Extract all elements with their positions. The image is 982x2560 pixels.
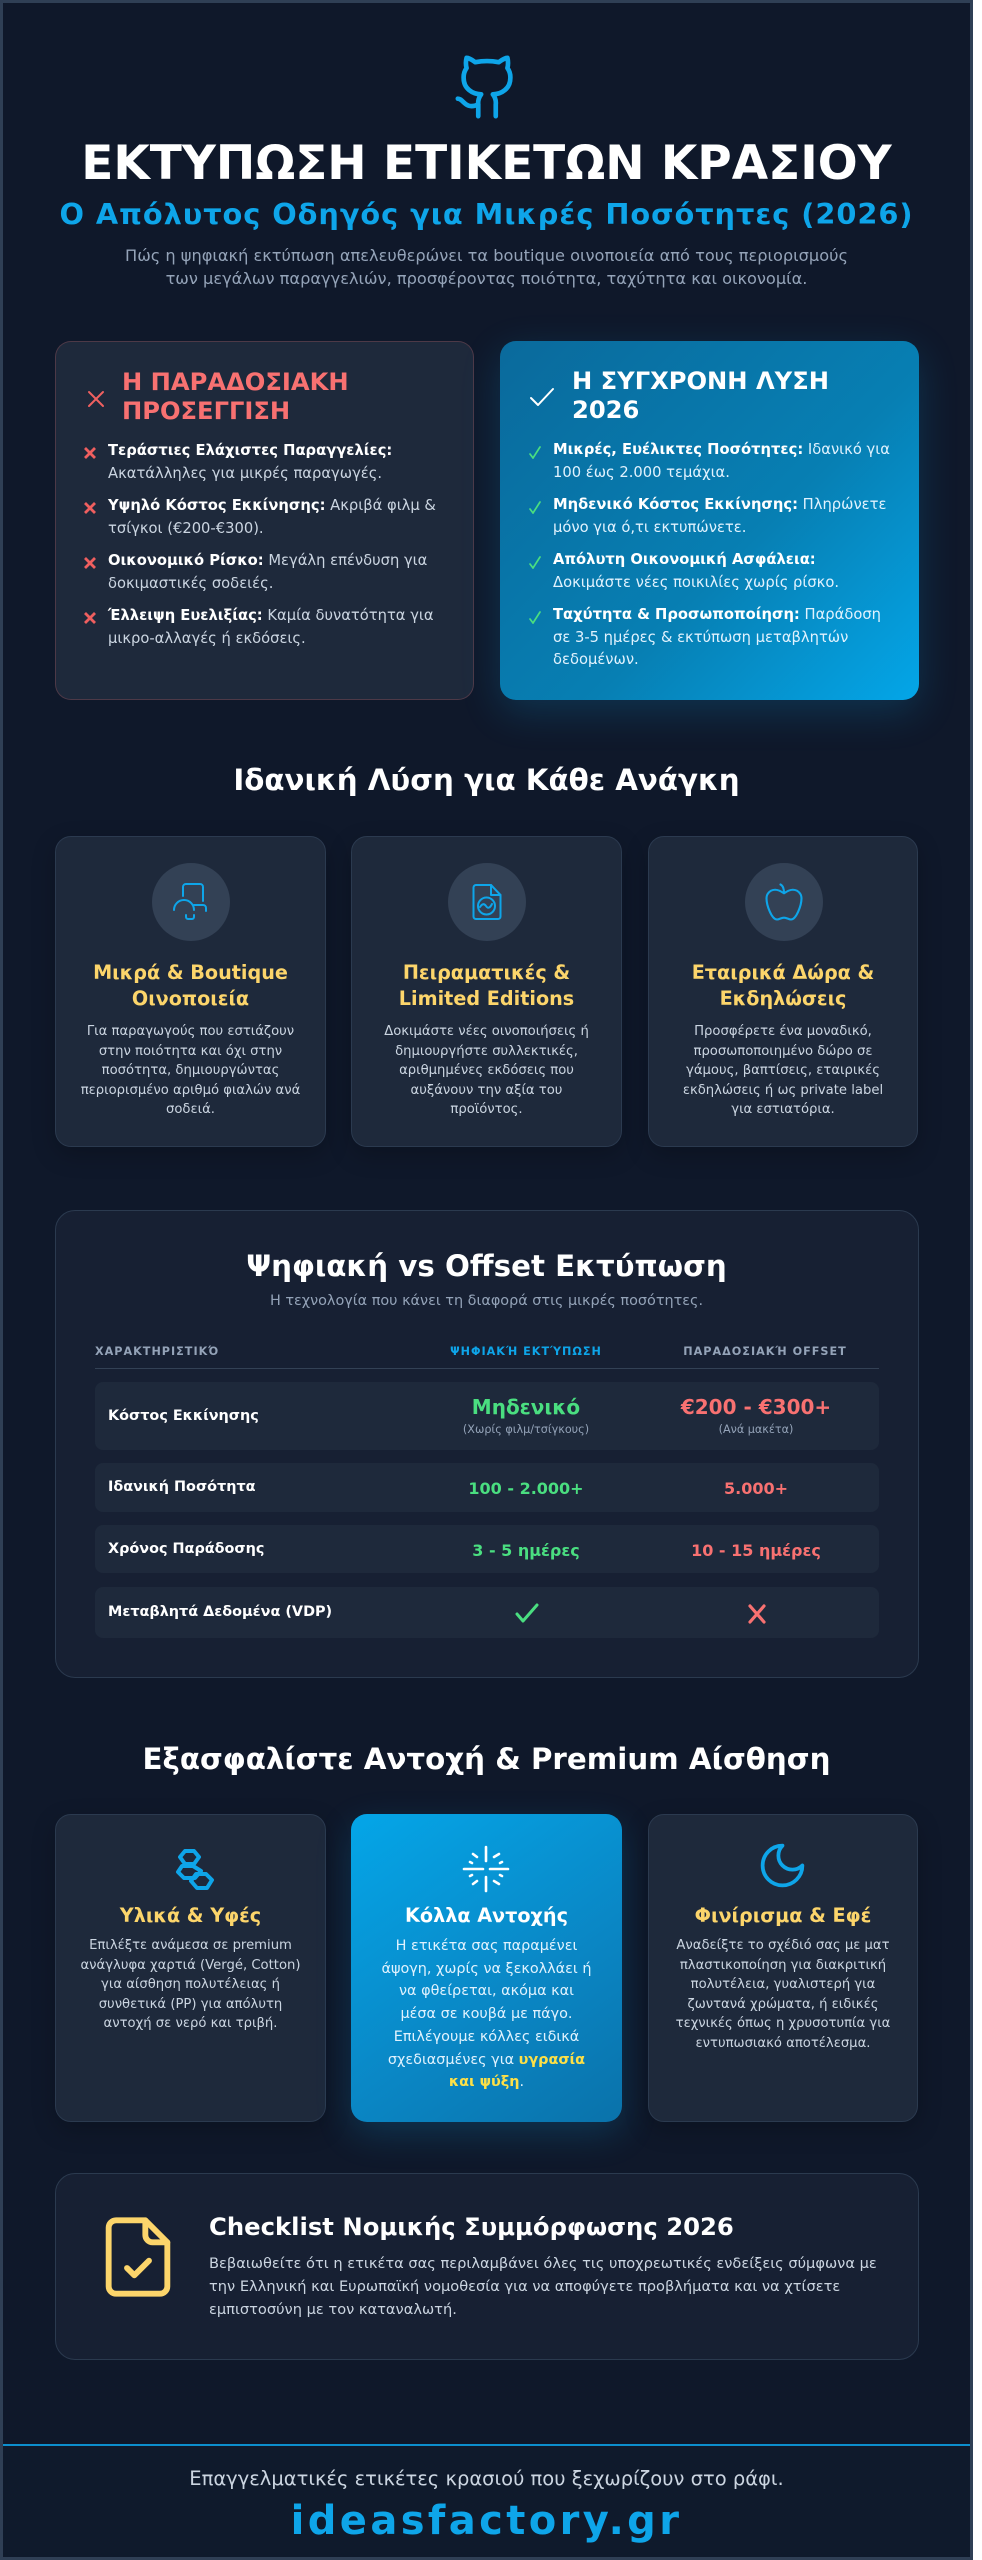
icon: cross [84,557,96,569]
card text: πολυτέλεια, γυαλιστερή για [691,1977,875,1992]
card title: Κόλλα Αντοχής [405,1904,568,1927]
icon: cat logo [456,56,513,118]
card title: Μικρά & Boutique [93,961,288,984]
text: δοκιμαστικές σοδειές. [108,575,273,592]
offset value: €200 - €300+ [681,1395,831,1419]
card text [683,1024,883,1117]
checklist title: Checklist Νομικής Συμμόρφωσης 2026 [209,2212,734,2241]
footer website: ideasfactory.gr [291,2498,682,2544]
card: adhesive [351,1814,622,2122]
card text: πλαστικοποίηση για διακριτική [680,1958,886,1972]
icon: burst [461,1844,511,1894]
panel: modern solution [500,341,919,700]
card title: Εταιρικά Δώρα & [692,961,874,984]
card text: να φθείρεται, ακόμα και [399,1983,574,1999]
card: corporate gifts [648,836,918,1147]
card text: αντοχή σε νερό και τριβή. [104,2016,277,2031]
row: start cost [95,1382,879,1450]
text: μικρο-αλλαγές ή εκδόσεις. [108,630,306,647]
heading: durability and premium feel: Εξασφαλίστε Αντοχή & Premium Αίσθηση [143,1742,830,1776]
card text: τεχνικές όπως η χρυσοτυπία για [676,2016,890,2031]
icon: heading cross [88,391,104,407]
card text: ζωντανά χρώματα, ή ειδικές [688,1996,878,2012]
heading: modern solution: Η ΣΥΓΧΡΟΝΗ ΛΥΣΗ [572,367,829,395]
card text: εντυπωσιακό αποτέλεσμα. [696,2036,870,2050]
text [553,441,890,481]
intro text: των μεγάλων παραγγελιών, προσφέροντας ποιότητα, ταχύτητα και οικονομία. [166,269,807,288]
list item: financial safety [529,551,839,591]
heading: traditional approach: Η ΠΑΡΑΔΟΣΙΑΚΗ [122,368,349,396]
card text: αυξάνουν την αξία του [411,1082,562,1098]
icon: check [529,501,541,514]
table header: digital: ΨΗΦΙΑΚΉ ΕΚΤΎΠΩΣΗ [450,1345,602,1358]
digital note: (Χωρίς φιλμ/τσίγκους) [463,1423,589,1436]
row label: Μεταβλητά Δεδομένα (VDP) [108,1604,332,1620]
icon: heading check [530,388,554,406]
card text: και ψύξη. [449,2074,524,2090]
text: Μικρές, Ευέλικτες Ποσότητες: Ιδανικό για [553,441,890,458]
heading: modern solution: 2026 [572,396,639,424]
icon: person and square [152,863,230,941]
card title: Υλικά & Υφές [120,1904,261,1927]
icon: red cross [748,1604,766,1624]
card title [93,961,288,1010]
list item: minimum orders [84,442,392,482]
icon: green check [515,1603,539,1623]
text: τσίγκοι (€200-€300). [108,520,264,537]
card text [384,1024,589,1117]
text [108,497,436,537]
text: Τεράστιες Ελάχιστες Παραγγελίες: [108,442,392,459]
text [108,607,434,647]
card text: για αίσθηση πολυτέλειας ή [101,1977,280,1992]
card: limited editions [351,836,622,1147]
card title: Οινοποιεία [132,987,249,1010]
icon: check [529,446,541,459]
list item: financial risk [84,552,427,592]
card text: προϊόντος. [450,1102,523,1117]
text: Οικονομικό Ρίσκο: Μεγάλη επένδυση για [108,552,427,569]
text [553,551,839,591]
comparison title: Ψηφιακή vs Offset Εκτύπωση [246,1249,727,1283]
icon: file check [94,2213,182,2301]
intro text: Πώς η ψηφιακή εκτύπωση απελευθερώνει τα boutique οινοποιεία από τους περιορισμούς [125,246,848,265]
table header rule [95,1368,879,1369]
digital value: 100 - 2.000+ [468,1479,584,1498]
table header: offset: ΠΑΡΑΔΟΣΙΑΚΉ OFFSET [683,1345,847,1358]
card title: Εκδηλώσεις [720,987,846,1010]
checklist text: Βεβαιωθείτε ότι η ετικέτα σας περιλαμβάνει όλες τις υποχρεωτικές ενδείξεις σύμφωνα με [209,2255,877,2272]
text: Υψηλό Κόστος Εκκίνησης: Ακριβά φιλμ & [108,497,436,514]
intro text [125,246,848,288]
card text: εκδηλώσεις ή ως private label [683,1082,883,1098]
card text [56,1936,325,2034]
card text: σχεδιασμένες για υγρασία [388,2052,585,2068]
checklist text [209,2252,877,2321]
title: ΕΚΤΥΠΩΣΗ ΕΤΙΚΕΤΩΝ ΚΡΑΣΙΟΥ [81,136,892,191]
text [108,442,392,482]
list item: small quantities [529,441,890,481]
digital value: Μηδενικό [472,1395,580,1419]
list item: zero start cost [529,496,886,536]
text: 100 έως 2.000 τεμάχια. [553,464,730,481]
text: μόνο για ό,τι εκτυπώνετε. [553,519,746,536]
text: Μηδενικό Κόστος Εκκίνησης: Πληρώνετε [553,496,886,513]
icon: document with image [448,863,526,941]
card text: για εστιατόρια. [731,1102,835,1117]
card title: Φινίρισμα & Εφέ [695,1904,871,1927]
text: Δοκιμάστε νέες ποικιλίες χωρίς ρίσκο. [553,574,839,591]
text: Έλλειψη Ευελιξίας: Καμία δυνατότητα για [108,607,434,624]
card title: Limited Editions [399,987,574,1010]
panel: legal checklist [55,2173,919,2360]
comparison subtitle: Η τεχνολογία που κάνει τη διαφορά στις μικρές ποσότητες. [270,1293,703,1309]
offset value: 10 - 15 ημέρες [691,1541,821,1560]
list item: speed and personalisation [529,606,881,668]
icon: cross [84,612,96,624]
heading: ideal solution: Ιδανική Λύση για Κάθε Ανάγκη [233,763,740,797]
card text: Αναδείξτε το σχέδιό σας με ματ [676,1938,890,1953]
card text: Προσφέρετε ένα μοναδικό, [694,1024,872,1039]
icon: check [529,556,541,569]
checklist text: την Ελληνική και Ευρωπαϊκή νομοθεσία για να αποφύγετε προβλήματα και να χτίσετε [209,2278,840,2295]
card text: ανάγλυφα χαρτιά (Vergé, Cotton) [80,1958,301,1972]
card text: αριθμημένες εκδόσεις που [399,1063,574,1078]
row: delivery time [95,1525,879,1573]
card text: Η ετικέτα σας παραμένει [396,1938,577,1954]
icon: cross [84,447,96,459]
card title [692,961,874,1010]
offset note: (Ανά μακέτα) [719,1423,793,1436]
text: Ταχύτητα & Προσωποποίηση: Παράδοση [553,606,881,623]
card title: Πειραματικές & [403,961,570,984]
card text: Για παραγωγούς που εστιάζουν [87,1024,294,1039]
icon: check [529,611,541,624]
icon: apple [745,863,823,941]
text [108,552,427,592]
row: ideal quantity [95,1463,879,1512]
card text: Επιλέγουμε κόλλες ειδικά [394,2029,579,2045]
row label: Ιδανική Ποσότητα [108,1479,256,1495]
card: finishing [648,1814,918,2122]
text [553,606,881,668]
text: σε 3-5 ημέρες & εκτύπωση μεταβλητών [553,629,848,646]
text [553,496,886,536]
card text: προσωποποιημένο δώρο σε [694,1044,872,1058]
card text: γάμους, βαπτίσεις, εταιρικές [686,1063,880,1078]
row label: Κόστος Εκκίνησης [108,1408,259,1424]
row label: Χρόνος Παράδοσης [108,1541,264,1557]
footer [0,2444,973,2560]
checklist text: εμπιστοσύνη με τον καταναλωτή. [209,2301,457,2318]
subtitle: Ο Απόλυτος Οδηγός για Μικρές Ποσότητες (2026) [60,197,913,231]
heading: traditional approach [122,368,349,425]
icon: cross [84,502,96,514]
footer tagline: Επαγγελματικές ετικέτες κρασιού που ξεχωρίζουν στο ράφι. [189,2467,784,2490]
list item: flexibility [84,607,434,647]
text: δεδομένων. [553,651,639,668]
card text [351,1935,622,2094]
heading: modern solution [572,367,829,424]
card text: ποσότητα, δημιουργώντας [102,1063,279,1078]
panel: traditional approach [55,341,474,700]
digital value: 3 - 5 ημέρες [472,1541,580,1560]
table header: feature: ΧΑΡΑΚΤΗΡΙΣΤΙΚΌ [95,1345,219,1358]
list item: start cost [84,497,436,537]
card text: μέσα σε κουβά με πάγο. [400,2006,572,2022]
text: Απόλυτη Οικονομική Ασφάλεια: [553,551,816,568]
card text: στην ποιότητα και όχι στην [99,1044,282,1058]
panel: comparison table [55,1210,919,1678]
card title [399,961,574,1010]
heading: traditional approach: ΠΡΟΣΕΓΓΙΣΗ [122,397,290,425]
text: Ακατάλληλες για μικρές παραγωγές. [108,465,382,482]
card text: δημιουργήστε συλλεκτικές, [395,1044,578,1058]
card text [81,1024,300,1117]
card text: άψογη, χωρίς να ξεκολλάει ή [381,1961,592,1977]
card: boutique wineries [55,836,326,1147]
card text: περιορισμένο αριθμό φιαλών ανά [81,1082,300,1098]
icon: moon [756,1839,809,1892]
card text: Δοκιμάστε νέες οινοποιήσεις ή [384,1024,589,1039]
card text: σοδειά. [166,1102,215,1117]
card text: Επιλέξτε ανάμεσα σε premium [89,1938,292,1953]
card text: συνθετικά (PP) για απόλυτη [99,1996,282,2012]
icon: linked hexagons [173,1848,217,1894]
row: variable data [95,1587,879,1638]
card: materials [55,1814,326,2122]
card text [649,1936,917,2053]
offset value: 5.000+ [724,1479,788,1498]
